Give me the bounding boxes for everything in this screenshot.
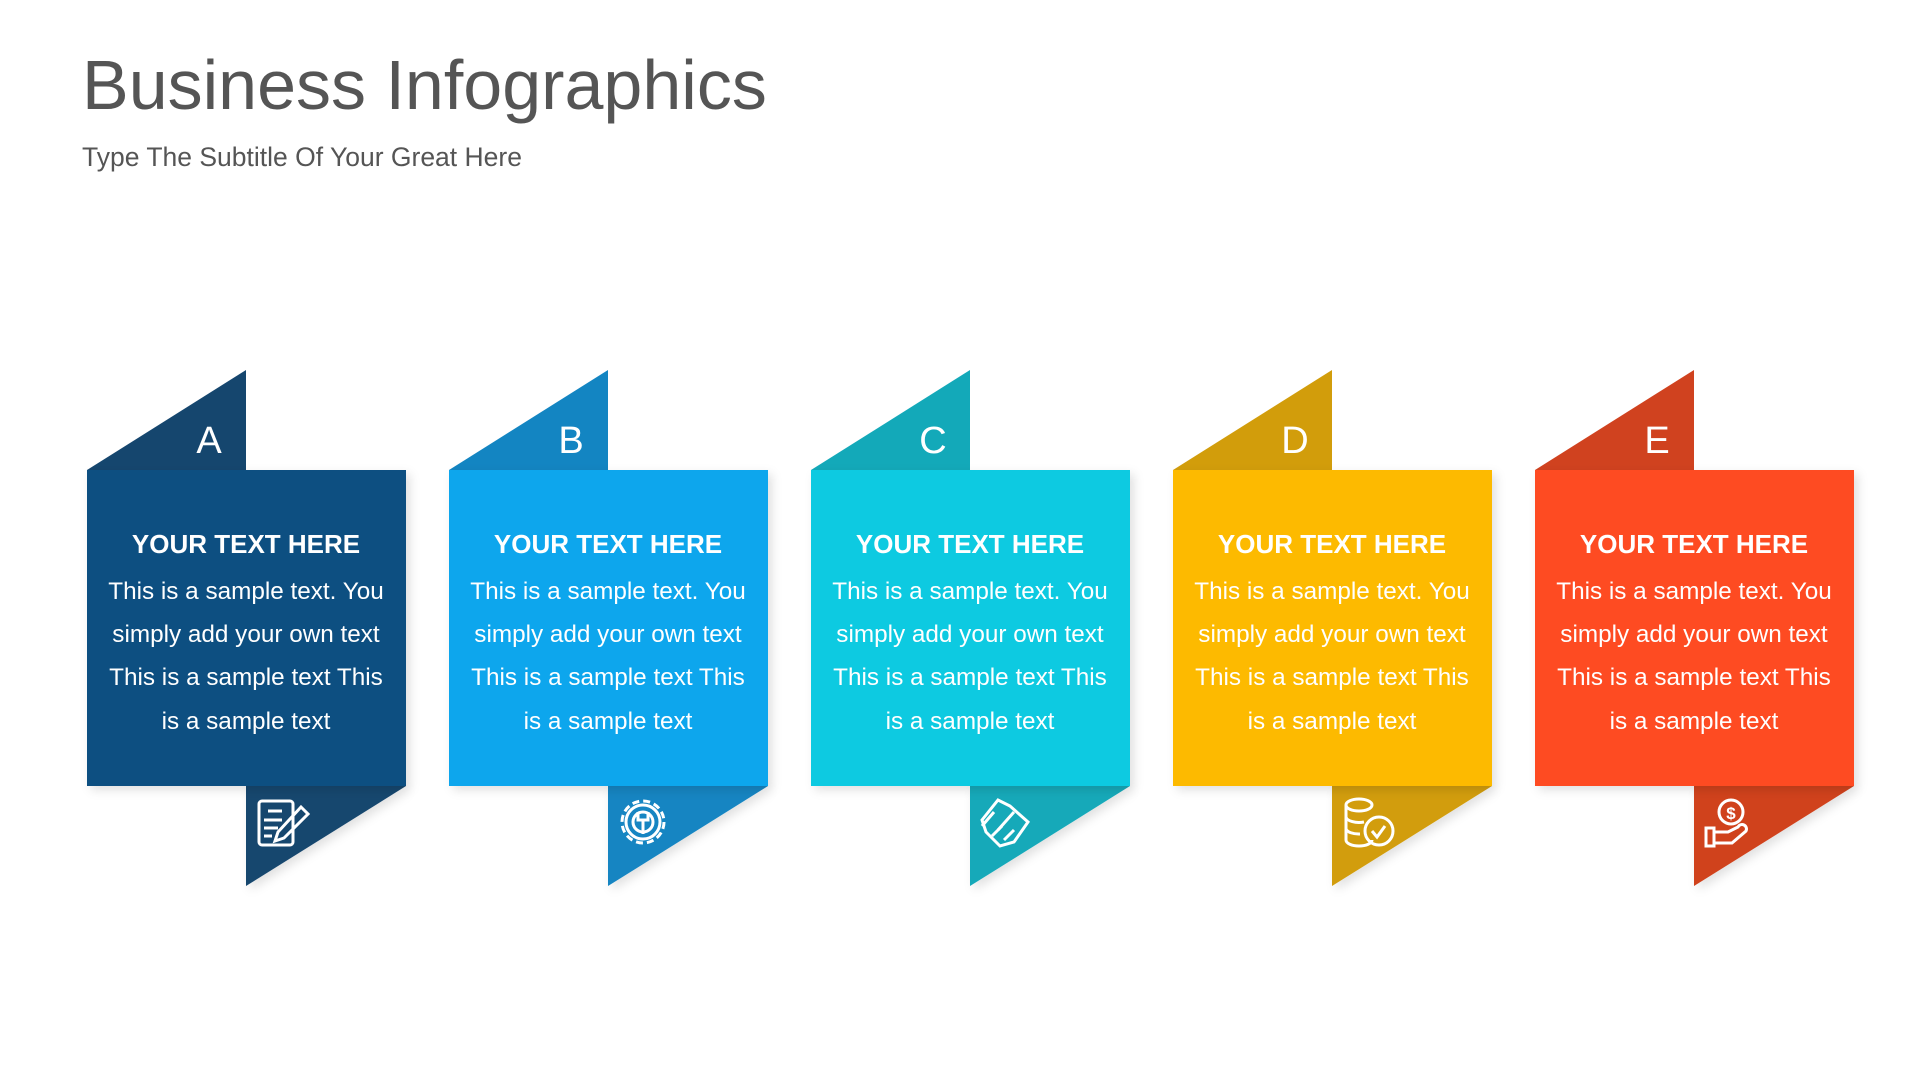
panel: D: is a sample text: [1248, 708, 1417, 735]
panel: E: simply add your own text: [1560, 621, 1828, 648]
panel: D: YOUR TEXT HERE: [1218, 529, 1446, 559]
panel: E: E: [1644, 420, 1670, 462]
icon: hand coin: $: [1726, 804, 1736, 823]
panel: B: This is a sample text This: [471, 664, 745, 691]
panel: B: This is a sample text. You: [470, 578, 746, 605]
panel: C: This is a sample text. You: [832, 578, 1108, 605]
panel: D: D: [1281, 420, 1309, 462]
panel: B: [449, 370, 768, 886]
panel: C: [811, 370, 1130, 886]
icon: handshake: [982, 800, 1028, 846]
icon: coins check: [1346, 799, 1393, 846]
panel: C: simply add your own text: [836, 621, 1104, 648]
panel: C: C: [919, 420, 947, 462]
panel: B: simply add your own text: [474, 621, 742, 648]
panel: D: This is a sample text. You: [1194, 578, 1470, 605]
subtitle: Type The Subtitle Of Your Great Here: [82, 142, 522, 172]
panel: E: This is a sample text. You: [1556, 578, 1832, 605]
panel: E: YOUR TEXT HERE: [1580, 529, 1808, 559]
panel: A: is a sample text: [162, 708, 331, 735]
panel: A: A: [196, 420, 222, 462]
panel: B: YOUR TEXT HERE: [494, 529, 722, 559]
panel: C: YOUR TEXT HERE: [856, 529, 1084, 559]
panel: C: This is a sample text This: [833, 664, 1107, 691]
panel: D: [1173, 370, 1492, 886]
panel: E: is a sample text: [1610, 708, 1779, 735]
panel: E: [1535, 370, 1854, 886]
icon: gear: [622, 801, 664, 843]
panel: A: This is a sample text This: [109, 664, 383, 691]
panel: D: This is a sample text This: [1195, 664, 1469, 691]
panel: A: [87, 370, 406, 886]
panel: A: simply add your own text: [112, 621, 380, 648]
panel: C: is a sample text: [886, 708, 1055, 735]
panel: A: This is a sample text. You: [108, 578, 384, 605]
panel: B: B: [558, 420, 584, 462]
panel: A: YOUR TEXT HERE: [132, 529, 360, 559]
title: Business Infographics: [82, 46, 767, 124]
panel: E: This is a sample text This: [1557, 664, 1831, 691]
panel: B: is a sample text: [524, 708, 693, 735]
icon: document pen: [259, 801, 308, 845]
icon: hand coin: [1706, 800, 1746, 846]
panel: D: simply add your own text: [1198, 621, 1466, 648]
